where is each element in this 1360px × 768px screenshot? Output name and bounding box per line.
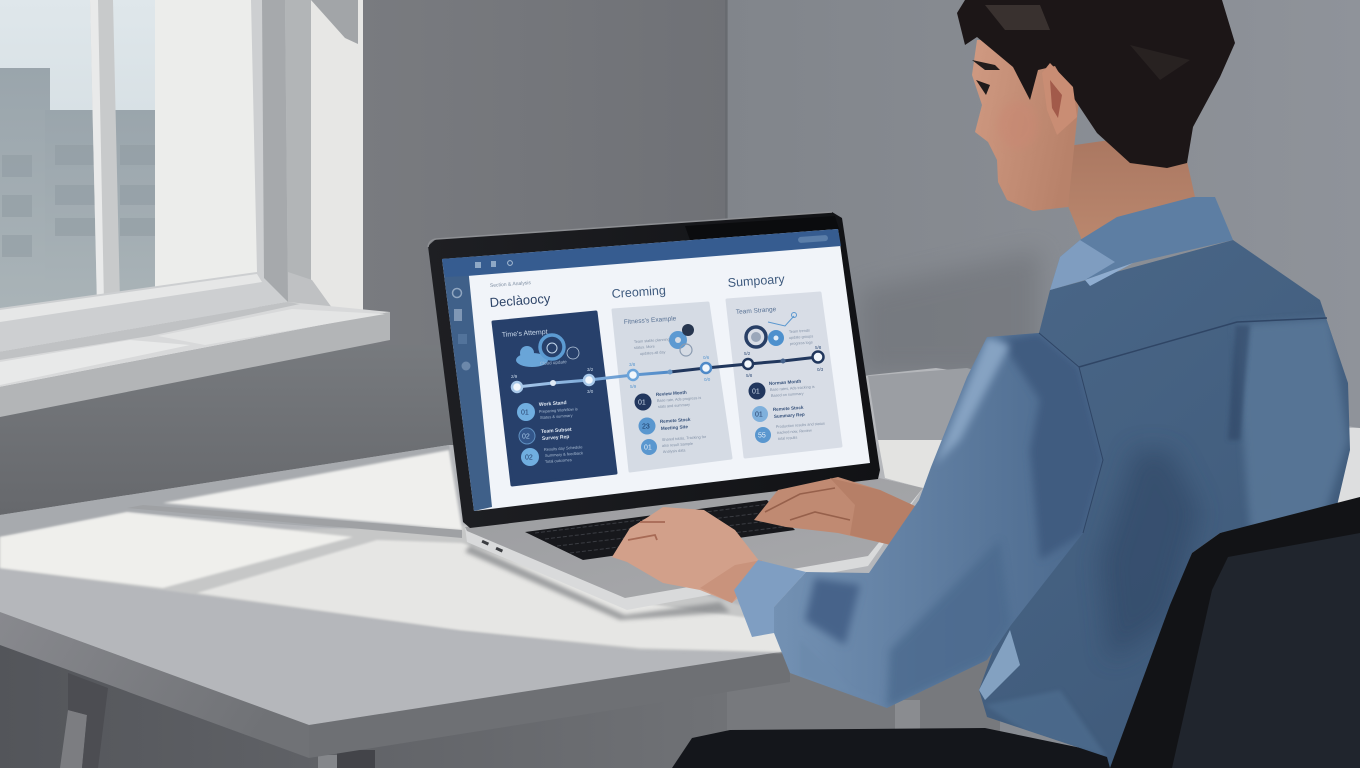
- laptop lid: [428, 212, 880, 528]
- panel: light middle: [613, 303, 731, 471]
- panel: light middle: status. More: [634, 345, 655, 350]
- icon: rings and network: [746, 312, 796, 347]
- step: 1: [748, 379, 815, 400]
- step: 2: [638, 417, 691, 434]
- window sill: [0, 312, 390, 417]
- panel: light middle: updates all day: [640, 350, 666, 356]
- office chair: [1110, 497, 1360, 768]
- laptop shadow: [465, 545, 730, 620]
- timeline labels: 0/6: [703, 355, 710, 360]
- step: 1: Base rate, Ads progress is: [657, 396, 701, 403]
- step: 3: Analysis data: [663, 448, 686, 454]
- step: 2: Summary Rep: [774, 412, 805, 419]
- step: 1: [634, 390, 701, 410]
- breadcrumb: Section & Analysis: [490, 280, 532, 289]
- timeline nodes: [512, 352, 824, 392]
- step: 2: 01: [755, 412, 763, 418]
- timeline labels: 0/0: [704, 377, 711, 382]
- table legs: [60, 673, 920, 768]
- step: 3: total results: [778, 436, 798, 441]
- step: 3: 01: [644, 444, 652, 452]
- heading: Creoming: Creoming: [611, 283, 666, 301]
- timeline labels: 3/0: [587, 389, 594, 394]
- panel: light right: [727, 293, 841, 457]
- step: 2: Team Subset: [541, 427, 572, 435]
- laptop screen: [442, 229, 870, 511]
- hair: [957, 0, 1235, 168]
- window panes with city view: [0, 0, 258, 320]
- icon: gears: [669, 324, 694, 356]
- timeline labels: 5/9: [630, 384, 637, 389]
- step: 2: 23: [642, 424, 650, 430]
- panel: light right: update groups: [789, 334, 813, 340]
- heading: Decíapocy: Declàoocy: [489, 291, 551, 310]
- timeline labels: 3/2: [587, 367, 594, 372]
- shirt cuff: [734, 560, 806, 637]
- person: [612, 0, 1350, 768]
- step: 2: Survey Rep: [542, 434, 570, 442]
- step: 3: Results day Schedule: [544, 444, 583, 452]
- trousers: [672, 728, 1115, 768]
- panel: light right: Team trends: [789, 329, 810, 334]
- step: 3: also result Sample: [662, 442, 693, 448]
- step: 3: Production results and status: [776, 422, 825, 429]
- step: 3: Total outcomes: [545, 457, 572, 464]
- timeline labels: 3/8: [629, 362, 636, 367]
- timeline labels: 5/8: [746, 373, 753, 378]
- panel: light middle: Team stable planning: [634, 338, 670, 344]
- step: 1: Based on summary: [771, 392, 804, 398]
- step: 2: Remote Stock: [660, 417, 691, 424]
- step: 1: Status & summary: [540, 413, 573, 420]
- step: 2: 02: [522, 434, 530, 440]
- step: 1: Review Month: [656, 390, 687, 397]
- panel: dark: [493, 312, 616, 485]
- step: 1: stats and summary: [658, 403, 690, 409]
- shirt collar: [1050, 197, 1233, 290]
- timeline labels: 5/8: [815, 345, 822, 350]
- step: 1: Preparing Workflow is: [539, 406, 578, 414]
- table: [0, 368, 1360, 768]
- panel: light right: progress logs: [790, 340, 813, 346]
- step: 1: Work Stand: [539, 400, 567, 408]
- shirt yoke seam: [1079, 318, 1327, 367]
- heading: Sumpoary: Sumpoary: [727, 272, 786, 290]
- step: 1: 01: [521, 410, 529, 416]
- laptop: [428, 212, 923, 620]
- step: 3: Summary & feedback: [545, 450, 583, 458]
- app sidebar: [442, 257, 492, 511]
- ear: [1042, 63, 1077, 135]
- step: 1: 01: [638, 400, 646, 406]
- neck: [1040, 130, 1215, 260]
- window: [0, 0, 390, 417]
- timeline: [511, 345, 824, 394]
- far hand: [754, 477, 917, 545]
- panel: dark: Cloud update: [540, 359, 567, 366]
- window recess: [285, 0, 312, 312]
- face: [972, 40, 1080, 211]
- step: 3: 55: [758, 432, 766, 440]
- step: 3: tracked now, Review: [777, 429, 812, 435]
- near hand: [612, 507, 765, 603]
- shoulder and sleeve: [774, 333, 1103, 708]
- table top: [0, 368, 1360, 725]
- step: 3: [641, 435, 707, 455]
- step: 3: [755, 422, 825, 443]
- window mullion: [90, 0, 120, 306]
- timeline labels: [511, 345, 824, 394]
- laptop keyboard: [525, 500, 795, 560]
- timeline labels: 5/2: [744, 351, 751, 356]
- icon: cloud and gear: [516, 335, 579, 367]
- step: 1: Base rates, Ads tracking is: [770, 385, 815, 392]
- timeline labels: 0/3: [817, 367, 824, 372]
- step: 1: [517, 400, 578, 421]
- laptop base: [465, 478, 923, 610]
- step: 2: Meeting Site: [661, 424, 689, 431]
- panel title: Team Strange: [736, 306, 777, 316]
- step: 2: [752, 405, 805, 422]
- step: 2: Remote Stock: [773, 405, 804, 412]
- step: 1: Norman Month: [769, 379, 802, 386]
- timeline labels: 2/9: [511, 374, 518, 379]
- panel title: Time's Attempt: [502, 329, 548, 339]
- step: 2: [519, 427, 572, 444]
- step: 3: [521, 444, 583, 466]
- shirt back: [979, 240, 1350, 768]
- table edge: [0, 612, 309, 758]
- sunlight on table: [0, 450, 800, 652]
- window frame: [0, 0, 288, 352]
- step: 1: 01: [752, 388, 760, 396]
- panel title: Fitness's Example: [624, 315, 677, 326]
- step: 3: 02: [525, 454, 533, 462]
- app header bar: [442, 229, 841, 277]
- step: 3: Shared totals, Tracking for: [662, 435, 707, 442]
